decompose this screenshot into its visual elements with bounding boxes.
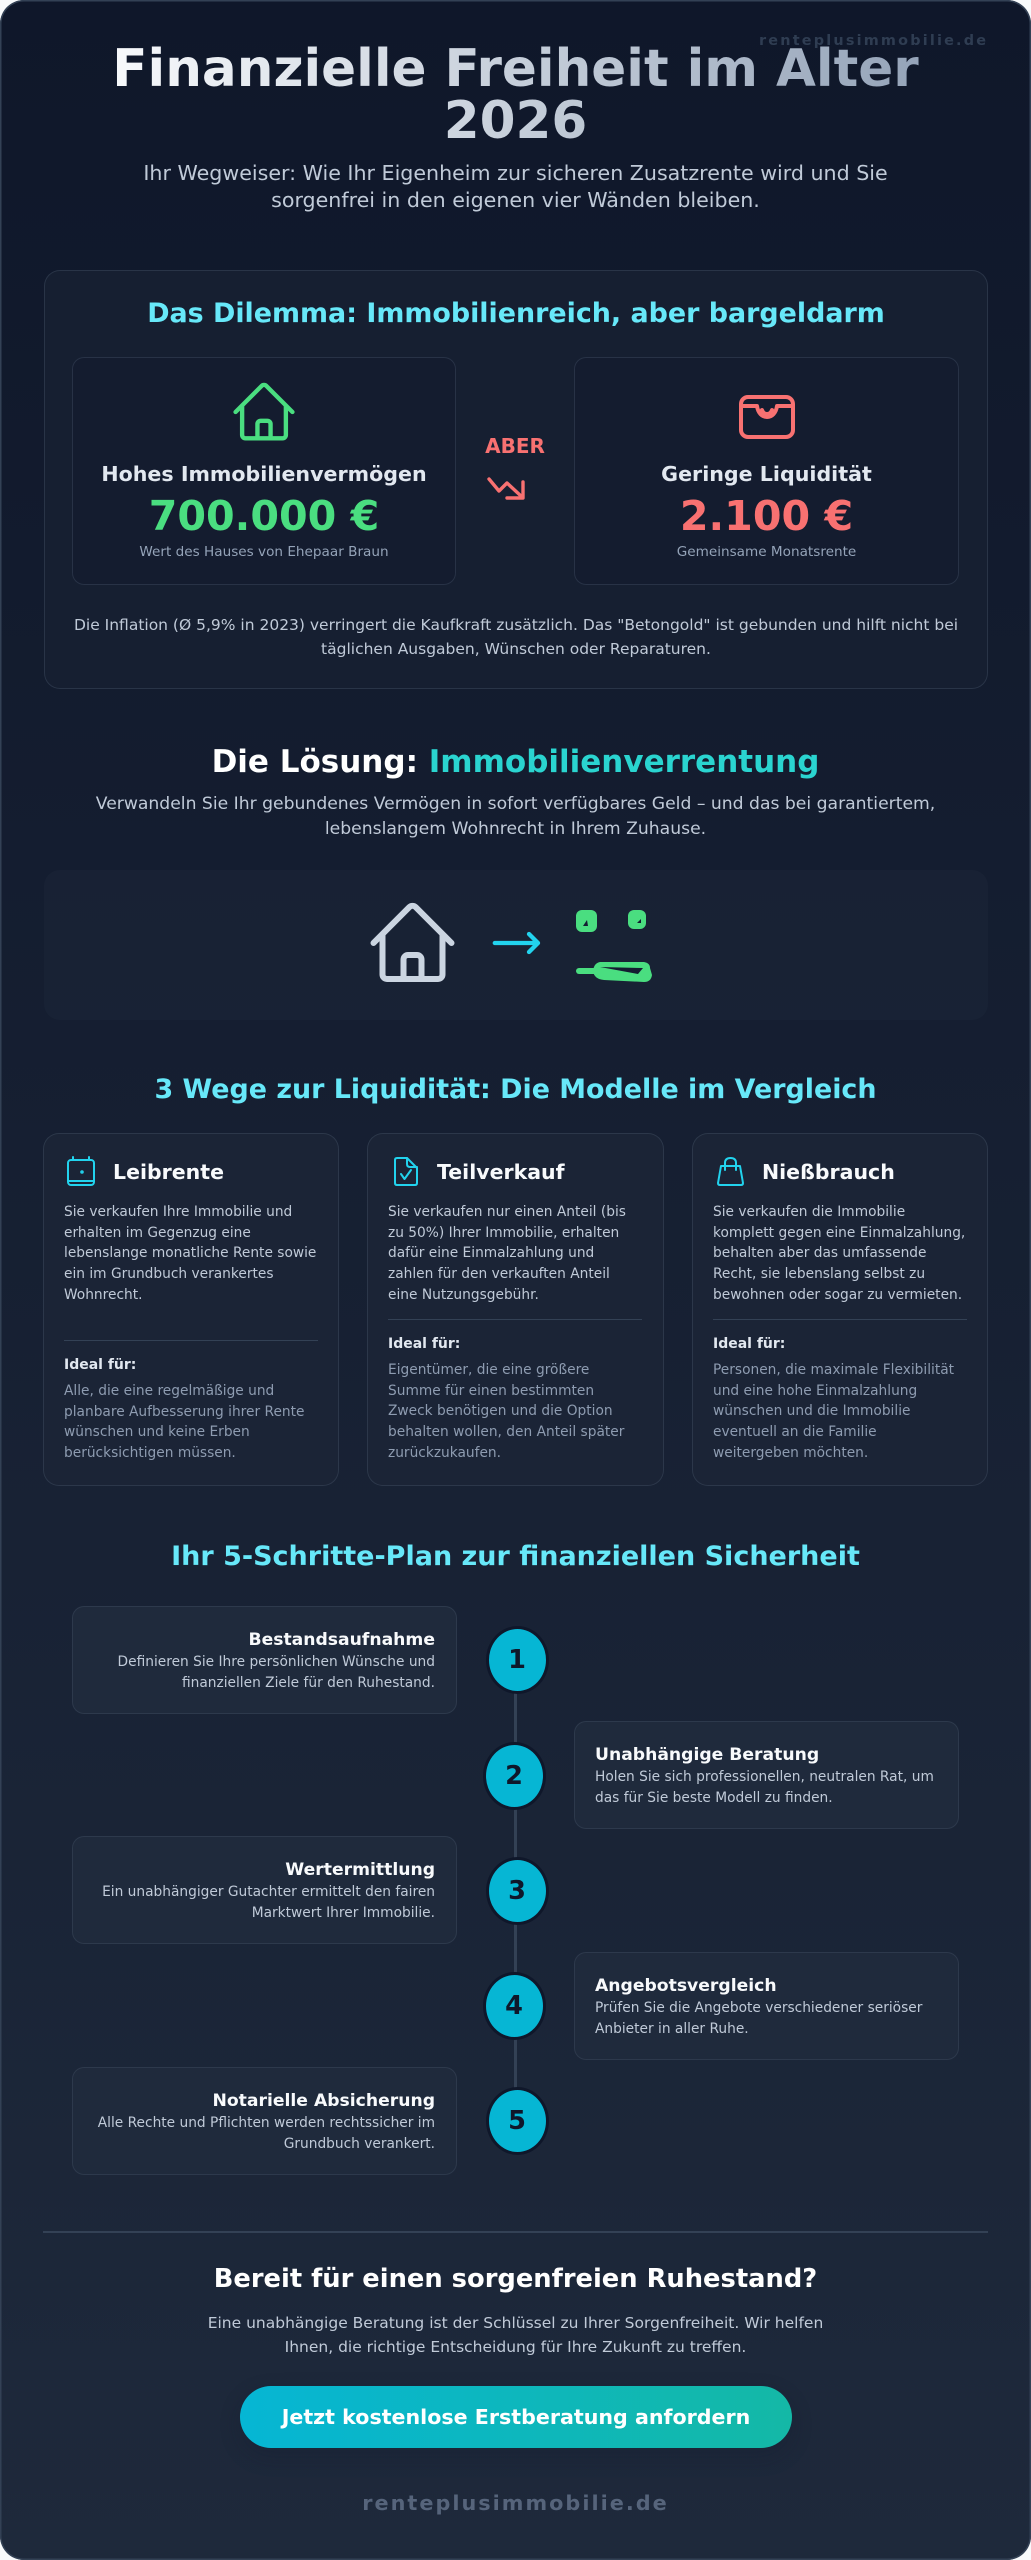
ideal text: wünschen und die Immobilie xyxy=(713,1403,910,1419)
ideal text xyxy=(64,1383,304,1461)
step 2 number xyxy=(482,1742,546,1810)
ideal text xyxy=(388,1362,624,1461)
step 4 card xyxy=(574,1952,959,2060)
description: Sie verkaufen die Immobilie xyxy=(713,1204,905,1220)
inflation note: täglichen Ausgaben, Wünschen oder Reparaturen. xyxy=(321,640,711,658)
step 4 number: 4 xyxy=(505,1991,523,2021)
ideal text: und eine hohe Einmalzahlung xyxy=(713,1383,917,1399)
heading: steps: Ihr 5-Schritte-Plan zur finanziellen Sicherheit xyxy=(171,1541,860,1572)
panel: dilemma xyxy=(44,270,988,689)
icon: shopping bag xyxy=(717,1157,744,1186)
icon: house xyxy=(374,906,452,979)
step text: Holen Sie sich professionellen, neutralen Rat, um xyxy=(595,1769,934,1785)
step 4 number xyxy=(482,1972,546,2040)
heading: solution: Die Lösung: Immobilienverrentung xyxy=(212,744,819,780)
title: 2026 xyxy=(444,91,587,151)
panel: niessbrauch xyxy=(692,1133,988,1486)
icon: arrow xyxy=(495,934,538,952)
step title: Unabhängige Beratung xyxy=(595,1745,819,1765)
ideal text: Alle, die eine regelmäßige und xyxy=(64,1383,274,1399)
description: Wohnrecht. xyxy=(64,1287,142,1303)
description xyxy=(388,1204,626,1303)
description: dafür eine Einmalzahlung und xyxy=(388,1245,594,1261)
description: Recht, sie lebenslang selbst zu xyxy=(713,1266,925,1282)
subtitle: Ihr Wegweiser: Wie Ihr Eigenheim zur sicheren Zusatzrente wird und Sie xyxy=(143,161,888,185)
card heading: Hohes Immobilienvermögen xyxy=(101,462,427,486)
inflation note: Die Inflation (Ø 5,9% in 2023) verringert die Kaufkraft zusätzlich. Das "Betongold" ist gebunden und hilft nicht bei xyxy=(74,616,958,634)
step title: Bestandsaufnahme xyxy=(248,1630,435,1650)
step text: Grundbuch verankert. xyxy=(284,2136,435,2152)
ideal text xyxy=(713,1362,954,1461)
ideal text: eventuell an die Familie xyxy=(713,1424,877,1440)
icon: money xyxy=(576,910,652,982)
step title: Notarielle Absicherung xyxy=(212,2091,435,2111)
step text: das für Sie beste Modell zu finden. xyxy=(595,1790,833,1806)
card title: Leibrente xyxy=(113,1160,224,1184)
ideal text: Eigentümer, die eine größere xyxy=(388,1362,589,1378)
step text xyxy=(595,2000,922,2037)
ideal text: Summe für einen bestimmten xyxy=(388,1383,594,1399)
panel: leibrente xyxy=(43,1133,339,1486)
heading: dilemma: Das Dilemma: Immobilienreich, aber bargeldarm xyxy=(147,298,885,329)
description: lebenslange monatliche Rente sowie xyxy=(64,1245,316,1261)
ideal text: berücksichtigen müssen. xyxy=(64,1445,236,1461)
inflation note xyxy=(74,616,958,658)
ideal text: weitergeben möchten. xyxy=(713,1445,868,1461)
step text: Alle Rechte und Pflichten werden rechtssicher im xyxy=(98,2115,435,2131)
ideal label: Ideal für: xyxy=(713,1336,785,1352)
solution description: Verwandeln Sie Ihr gebundenes Vermögen in sofort verfügbares Geld – und das bei garantiertem, xyxy=(96,794,935,814)
footer brand: renteplusimmobilie.de xyxy=(362,2491,669,2515)
step 3 number: 3 xyxy=(508,1876,526,1906)
step text: Anbieter in aller Ruhe. xyxy=(595,2021,749,2037)
top watermark: renteplusimmobilie.de xyxy=(759,33,988,49)
description: ein im Grundbuch verankertes xyxy=(64,1266,274,1282)
panel: teilverkauf xyxy=(367,1133,664,1486)
ideal text: Personen, die maximale Flexibilität xyxy=(713,1362,954,1378)
cta text: Eine unabhängige Beratung ist der Schlüssel zu Ihrer Sorgenfreiheit. Wir helfen xyxy=(208,2314,823,2332)
cta button: Jetzt kostenlose Erstberatung anfordern xyxy=(282,2405,750,2429)
cta text xyxy=(208,2314,823,2356)
icon: document check xyxy=(394,1157,418,1186)
step text: finanziellen Ziele für den Ruhestand. xyxy=(182,1675,435,1691)
title: Finanzielle Freiheit im Alter xyxy=(112,39,919,99)
title xyxy=(0,43,1031,147)
card: high property value xyxy=(72,357,456,585)
step 2 number: 2 xyxy=(505,1761,523,1791)
icon: red wallet xyxy=(739,395,795,439)
description: erhalten im Gegenzug eine xyxy=(64,1225,251,1241)
step title: Angebotsvergleich xyxy=(595,1976,777,1996)
icon: green house xyxy=(233,382,295,440)
step text: Definieren Sie Ihre persönlichen Wünsche und xyxy=(118,1654,435,1670)
value: 700.000 euro: 700.000 € xyxy=(149,492,379,540)
description: Sie verkaufen nur einen Anteil (bis xyxy=(388,1204,626,1220)
step 5 card xyxy=(72,2067,457,2175)
step text xyxy=(98,2115,435,2152)
cta heading: Bereit für einen sorgenfreien Ruhestand? xyxy=(214,2264,817,2294)
value: 2.100 euro: 2.100 € xyxy=(680,492,853,540)
step 1 number: 1 xyxy=(508,1645,526,1675)
step text xyxy=(595,1769,934,1806)
step title: Wertermittlung xyxy=(285,1860,435,1880)
step 5 number: 5 xyxy=(508,2106,526,2136)
step text: Ein unabhängiger Gutachter ermittelt den fairen xyxy=(102,1884,435,1900)
step text: Prüfen Sie die Angebote verschiedener seriöser xyxy=(595,2000,922,2016)
description xyxy=(713,1204,965,1303)
ideal text: Zweck benötigen und die Option xyxy=(388,1403,613,1419)
ideal text: zurückzukaufen. xyxy=(388,1445,501,1461)
cta button xyxy=(240,2386,792,2448)
step 3 number xyxy=(486,1857,548,1925)
solution description: lebenslangem Wohnrecht in Ihrem Zuhause. xyxy=(325,818,706,838)
step 5 number xyxy=(486,2087,548,2155)
description: behalten aber das umfassende xyxy=(713,1245,926,1261)
description: zahlen für den verkauften Anteil xyxy=(388,1266,610,1282)
description: bewohnen oder sogar zu vermieten. xyxy=(713,1287,962,1303)
card title: Nießbrauch xyxy=(762,1160,895,1184)
step 1 card xyxy=(72,1606,457,1714)
ideal text: planbare Aufbesserung ihrer Rente xyxy=(64,1404,304,1420)
step 3 card xyxy=(72,1836,457,1944)
caption: Wert des Hauses von Ehepaar Braun xyxy=(139,544,389,560)
step text xyxy=(118,1654,435,1691)
ideal label: Ideal für: xyxy=(388,1336,460,1352)
ideal label: Ideal für: xyxy=(64,1357,136,1373)
step text xyxy=(102,1884,435,1921)
caption: Gemeinsame Monatsrente xyxy=(677,544,856,560)
description: komplett gegen eine Einmalzahlung, xyxy=(713,1225,965,1241)
solution description xyxy=(96,794,935,838)
icon: trending down arrow xyxy=(487,477,525,500)
card: low liquidity xyxy=(574,357,959,585)
card title: Teilverkauf xyxy=(437,1160,565,1184)
label: aber: ABER xyxy=(485,434,545,458)
ideal text: behalten wollen, den Anteil später xyxy=(388,1424,624,1440)
card heading: Geringe Liquidität xyxy=(661,462,872,486)
subtitle: sorgenfrei in den eigenen vier Wänden bleiben. xyxy=(271,188,760,212)
step 2 card xyxy=(574,1721,959,1829)
description: eine Nutzungsgebühr. xyxy=(388,1287,539,1303)
description: zu 50%) Ihrer Immobilie, erhalten xyxy=(388,1225,619,1241)
description: Sie verkaufen Ihre Immobilie und xyxy=(64,1204,292,1220)
heading: models: 3 Wege zur Liquidität: Die Modelle im Vergleich xyxy=(154,1074,876,1105)
description xyxy=(64,1204,316,1303)
step 1 number xyxy=(486,1626,548,1694)
cta text: Ihnen, die richtige Entscheidung für Ihre Zukunft zu treffen. xyxy=(285,2338,746,2356)
icon: calendar xyxy=(67,1156,95,1186)
subtitle xyxy=(143,161,888,212)
step text: Marktwert Ihrer Immobilie. xyxy=(252,1905,435,1921)
ideal text: wünschen und keine Erben xyxy=(64,1424,250,1440)
panel: house to money graphic xyxy=(44,870,988,1020)
